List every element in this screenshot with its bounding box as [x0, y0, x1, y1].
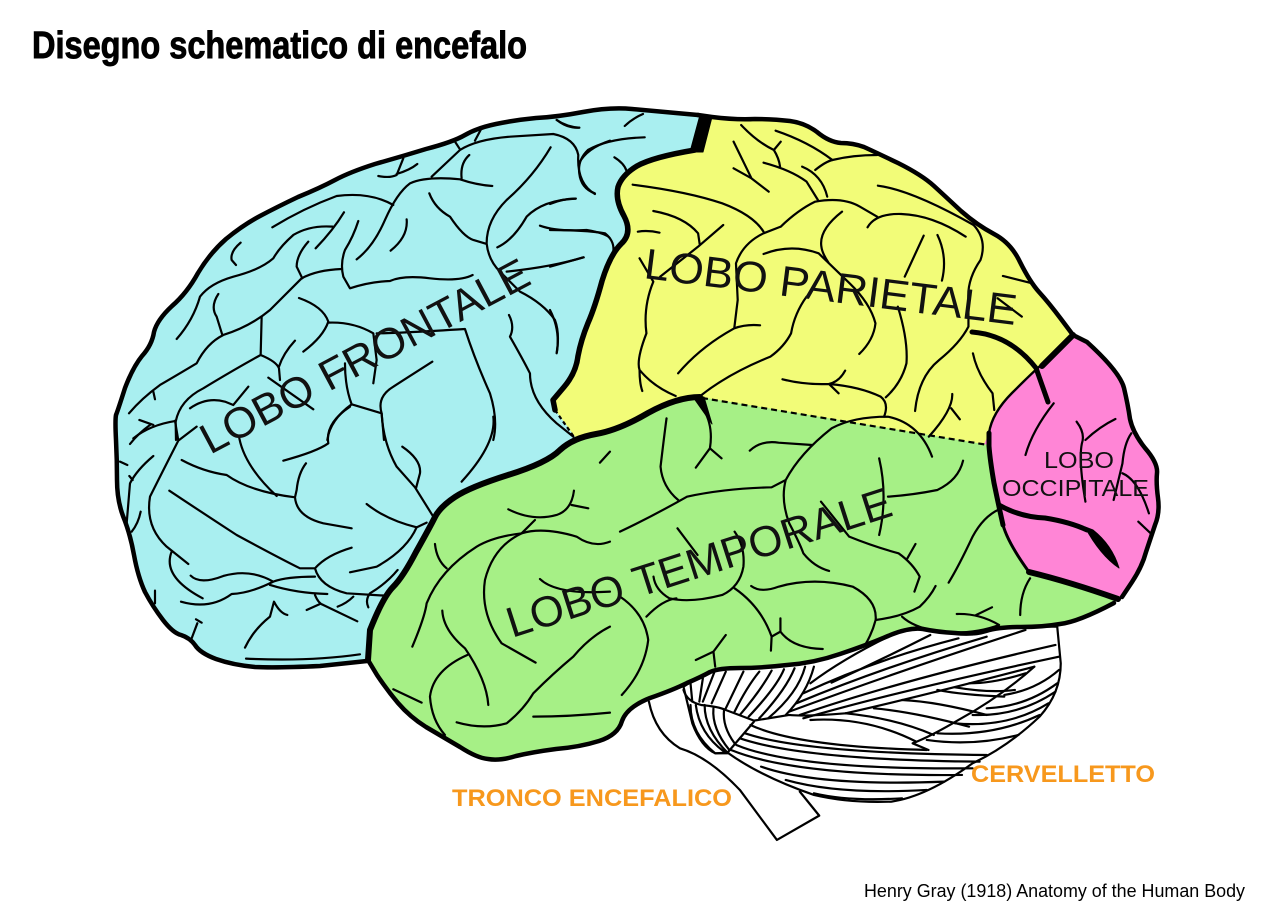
label: occipital lobe: LOBO — [1044, 447, 1114, 473]
temporal lobe sulci (right) — [620, 410, 1030, 695]
cerebellum — [683, 627, 1061, 802]
label: cerebellum: CERVELLETTO — [971, 761, 1155, 788]
temporal lobe region — [368, 397, 1122, 760]
label: brainstem: TRONCO ENCEFALICO — [452, 785, 732, 812]
dashed boundary parietal-temporal — [702, 398, 988, 445]
temporal lobe sulci (left) — [393, 452, 610, 735]
label: frontal lobe: LOBO FRONTALE — [192, 250, 538, 464]
parietal lobe region — [540, 117, 1073, 450]
label: occipital lobe — [1002, 447, 1149, 501]
occipital lobe region — [960, 335, 1159, 597]
brainstem — [649, 700, 832, 840]
outlines and thick fissures — [116, 108, 1159, 760]
label: occipital lobe: OCCIPITALE — [1002, 475, 1149, 501]
occipital lobe sulci — [1025, 403, 1151, 533]
parietal lobe sulci — [550, 114, 1032, 437]
source credit: Henry Gray (1918) Anatomy of the Human Body — [864, 881, 1245, 901]
frontal lobe region — [116, 108, 703, 667]
frontal lobe sulci (upper) — [129, 120, 610, 440]
label: temporal lobe: LOBO TEMPORALE — [500, 479, 898, 648]
dashed boundary frontal-parietal — [555, 410, 574, 437]
frontal lobe sulci (lower) — [120, 407, 494, 660]
title: Disegno schematico di encefalo — [32, 25, 527, 67]
label: parietal lobe: LOBO PARIETALE — [642, 240, 1020, 335]
